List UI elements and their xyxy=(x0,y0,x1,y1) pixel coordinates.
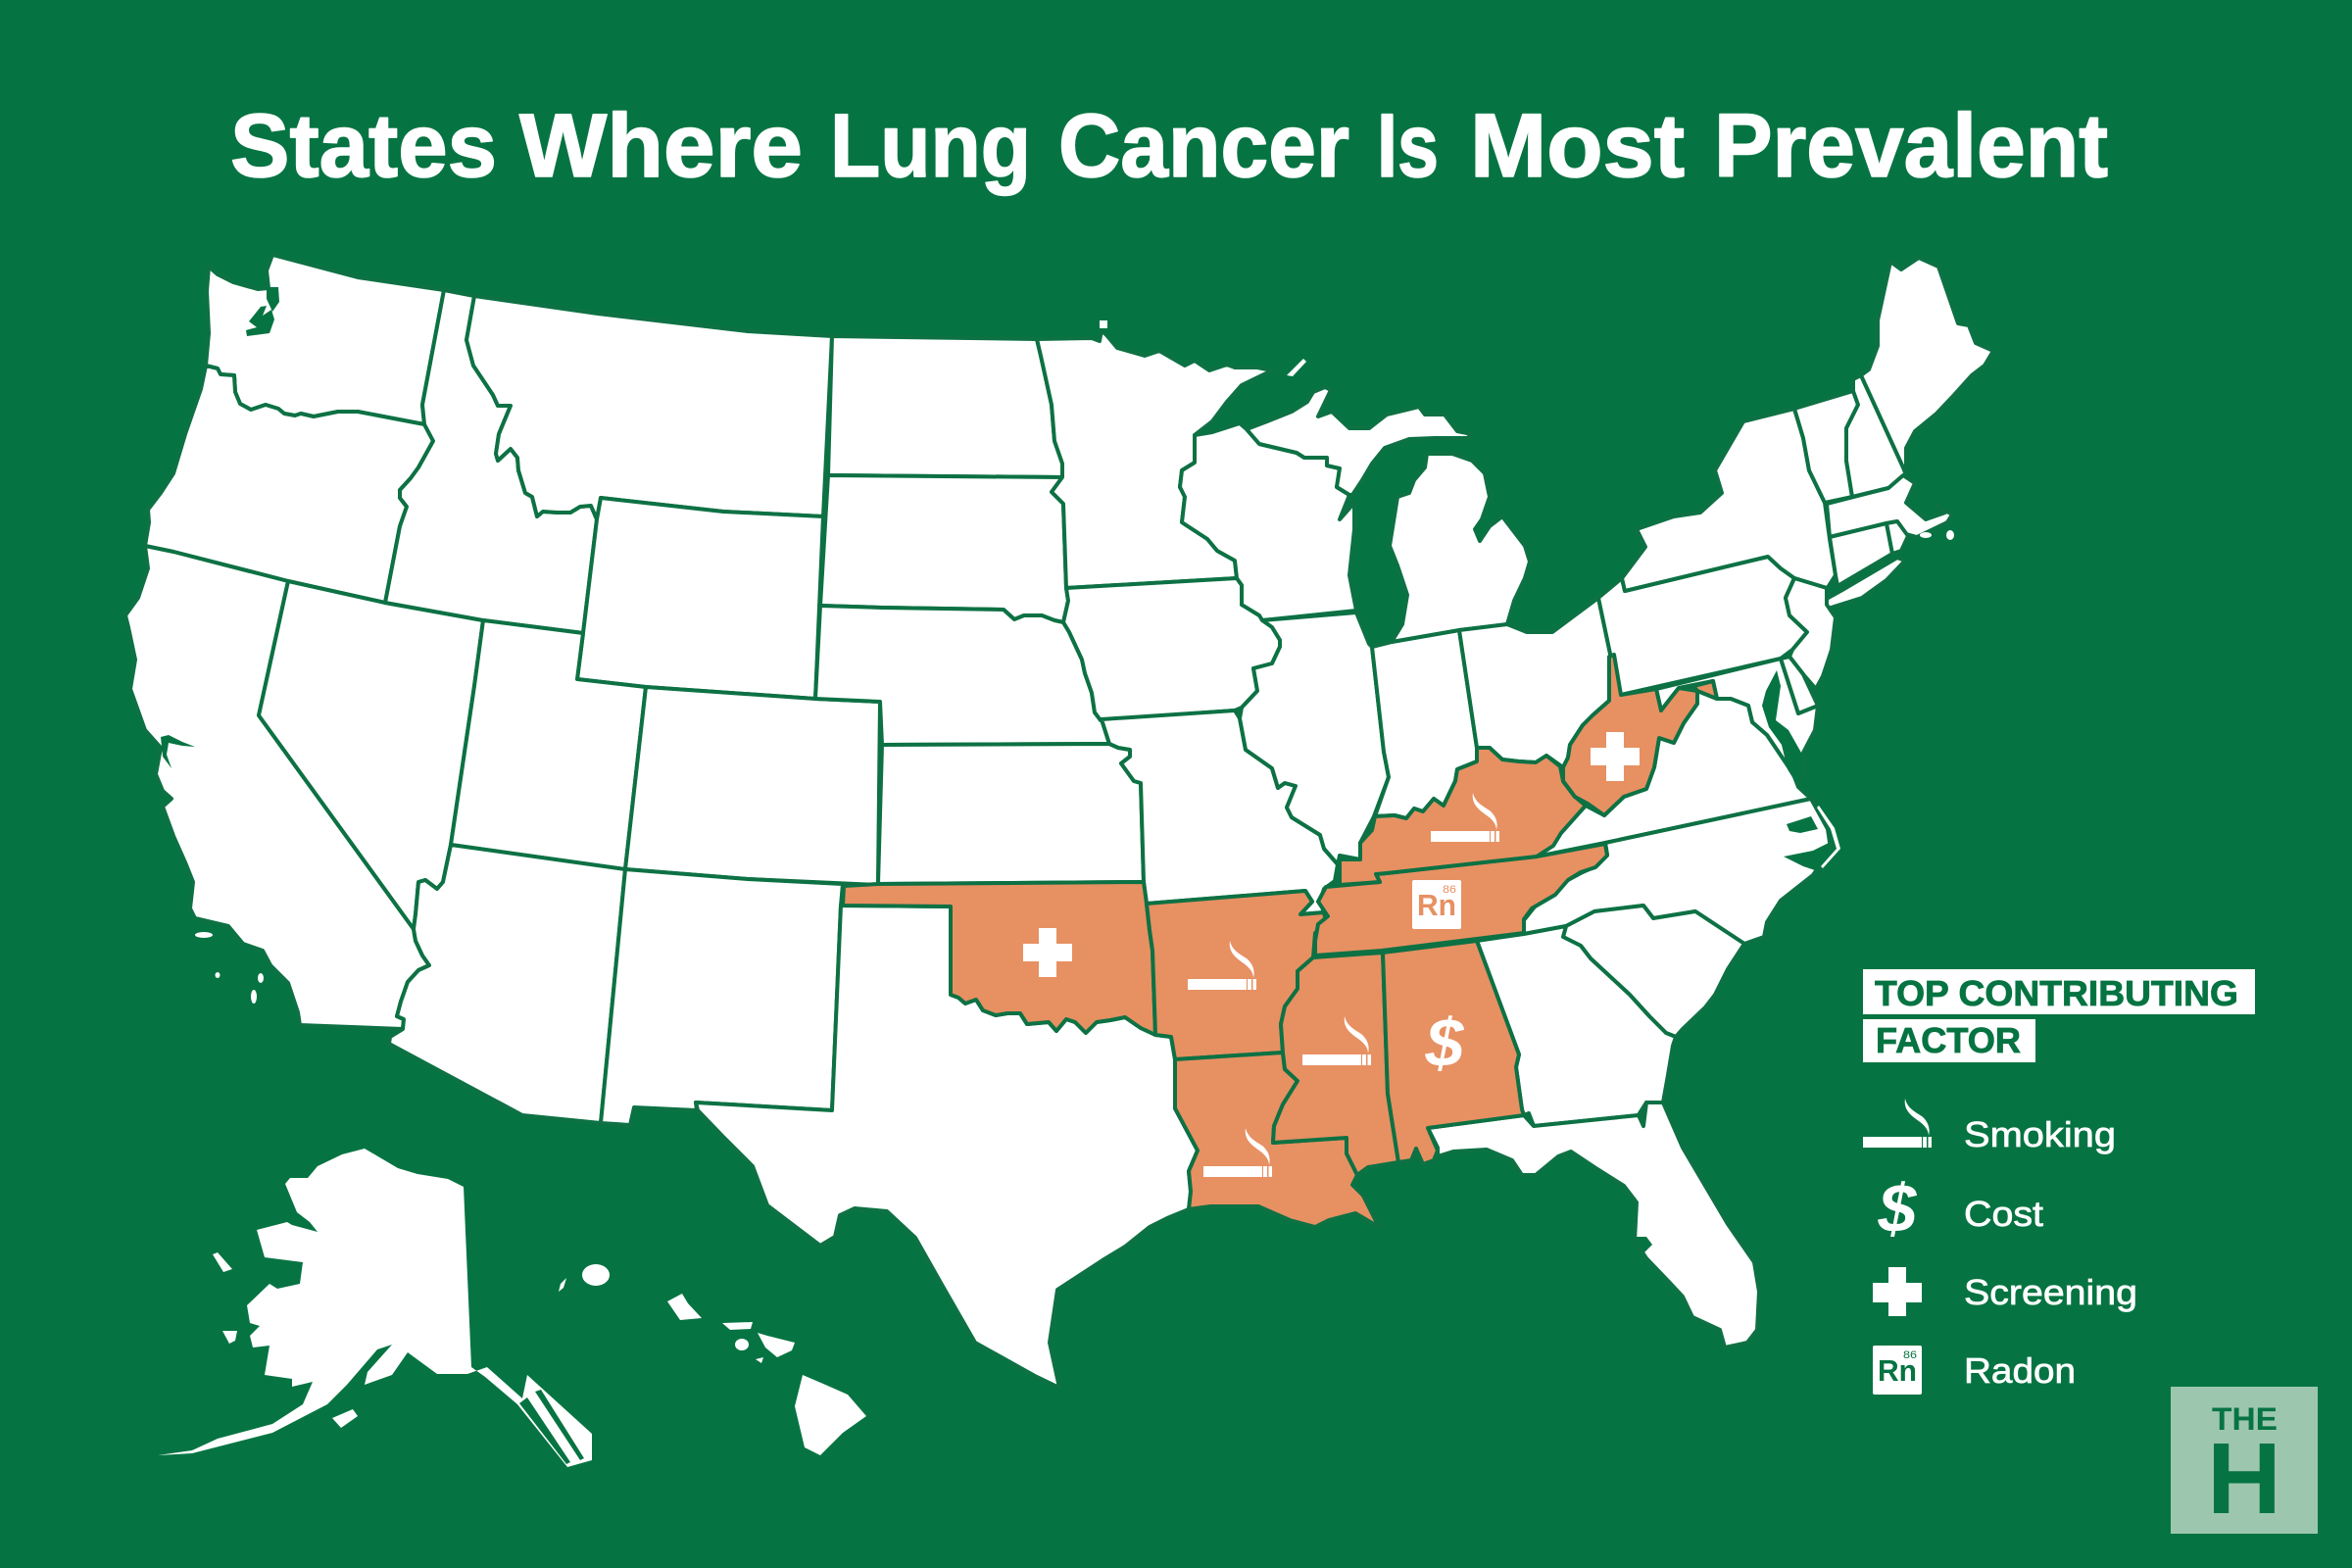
state: Idaho xyxy=(385,290,597,633)
icon: smoking (Kentucky) xyxy=(1431,793,1499,842)
state: Maryland and Delmarva xyxy=(1656,659,1818,779)
state: New York xyxy=(1622,409,1836,591)
icon: smoking (Arkansas) xyxy=(1188,941,1256,990)
state: Arkansas (smoking) xyxy=(1147,891,1326,1059)
state: Virginia xyxy=(1537,691,1811,857)
legend heading: TOP CONTRIBUTING xyxy=(1875,973,2238,1013)
state: North Carolina xyxy=(1524,799,1831,944)
legend row: smoking: Smoking xyxy=(1964,1114,2116,1154)
water details: bays and sounds xyxy=(161,287,1829,1462)
Alaska panhandle channels xyxy=(519,1390,584,1464)
legend row: smoking xyxy=(1863,1099,2116,1154)
icon: radon (Tennessee): Rn xyxy=(1417,888,1456,922)
state: Illinois xyxy=(1240,612,1389,864)
legend: top contributing factor xyxy=(1863,969,2255,1395)
map: Hawaii xyxy=(559,1264,866,1455)
state: Wisconsin xyxy=(1180,423,1356,620)
title: Prevalent xyxy=(1714,96,2108,196)
state: Kentucky (smoking) xyxy=(1340,748,1586,885)
legend row: screening: Screening xyxy=(1964,1272,2137,1312)
state: New Jersey xyxy=(1786,578,1836,689)
state: Pennsylvania xyxy=(1598,557,1807,695)
state: Oklahoma (screening) xyxy=(843,882,1155,1035)
legend row: radon: 86 xyxy=(1903,1349,1917,1361)
state: Kansas xyxy=(878,744,1144,884)
state: South Carolina xyxy=(1563,906,1744,1037)
state: Colorado xyxy=(625,687,880,885)
title: Most xyxy=(1470,96,1685,196)
title: Where xyxy=(519,96,803,196)
state: New Hampshire xyxy=(1846,375,1906,497)
state: South Dakota xyxy=(820,475,1068,622)
state: Texas xyxy=(696,906,1198,1388)
legend row: cost: $ xyxy=(1878,1170,1918,1247)
state: Georgia xyxy=(1477,926,1676,1126)
title: Is xyxy=(1377,96,1439,196)
state: New Mexico xyxy=(601,869,843,1125)
state: Michigan lower peninsula xyxy=(1390,454,1530,642)
state: Indiana xyxy=(1372,630,1477,818)
state: Alabama (cost) xyxy=(1383,941,1524,1164)
icon: screening cross (West Virginia) xyxy=(1591,732,1640,781)
state: Ohio xyxy=(1459,598,1610,767)
title: States xyxy=(230,96,497,196)
state: Minnesota xyxy=(1037,330,1272,588)
state: Massachusetts xyxy=(1827,475,1952,537)
logo: The H: THE xyxy=(2212,1401,2278,1437)
state: Rhode Island xyxy=(1886,521,1908,554)
logo: The H xyxy=(2171,1387,2318,1535)
state: Mississippi (smoking) xyxy=(1273,953,1398,1175)
state: Arizona xyxy=(389,845,625,1123)
icon: screening cross (Oklahoma) xyxy=(1023,928,1072,977)
title xyxy=(230,96,2108,196)
islands and outer banks xyxy=(195,320,1954,1004)
state: Connecticut xyxy=(1830,523,1892,586)
legend row: radon: Rn xyxy=(1878,1353,1917,1388)
logo: The H: H xyxy=(2207,1422,2281,1535)
state: West Virginia eastern panhandle xyxy=(1693,681,1717,699)
legend row: cost xyxy=(1878,1170,2043,1247)
icon: radon (Tennessee) xyxy=(1412,880,1461,929)
title: Lung xyxy=(830,96,1031,196)
state: North Dakota xyxy=(828,336,1062,477)
icon: smoking (Louisiana) xyxy=(1203,1128,1272,1177)
state: Nebraska xyxy=(815,606,1109,745)
icon: radon (Tennessee): 86 xyxy=(1443,884,1456,896)
state: Michigan upper peninsula xyxy=(1247,387,1472,495)
title: Cancer xyxy=(1058,96,1349,196)
legend row: radon xyxy=(1873,1346,2076,1395)
state: Louisiana (smoking) xyxy=(1175,1053,1379,1227)
state: Missouri xyxy=(1102,710,1338,914)
state: California xyxy=(125,546,429,1029)
state: Montana xyxy=(466,296,832,519)
state: Iowa xyxy=(1063,578,1280,720)
legend row: radon: Radon xyxy=(1964,1350,2076,1391)
state: Nevada xyxy=(259,581,483,929)
state: Vermont xyxy=(1794,391,1858,503)
state: Maine xyxy=(1861,258,1993,467)
legend row: cost: Cost xyxy=(1964,1194,2043,1234)
state: West Virginia (screening) xyxy=(1563,655,1697,815)
map: contiguous United States xyxy=(125,255,1993,1388)
icon: cost (Alabama): $ xyxy=(1425,1004,1465,1081)
state: Wyoming xyxy=(577,498,823,699)
icon: smoking (Mississippi) xyxy=(1302,1016,1371,1065)
state: Delaware xyxy=(1781,657,1818,713)
legend row: screening xyxy=(1873,1267,2137,1316)
state: Tennessee (radon) xyxy=(1315,844,1607,956)
map: Alaska xyxy=(158,1149,592,1467)
state: Utah xyxy=(451,620,646,869)
state: Oregon xyxy=(145,366,433,603)
legend heading: FACTOR xyxy=(1876,1020,2021,1060)
state: Florida xyxy=(1428,1102,1759,1348)
state: Long Island xyxy=(1825,558,1905,610)
state: Washington xyxy=(206,255,444,424)
legend heading xyxy=(1863,969,2255,1062)
